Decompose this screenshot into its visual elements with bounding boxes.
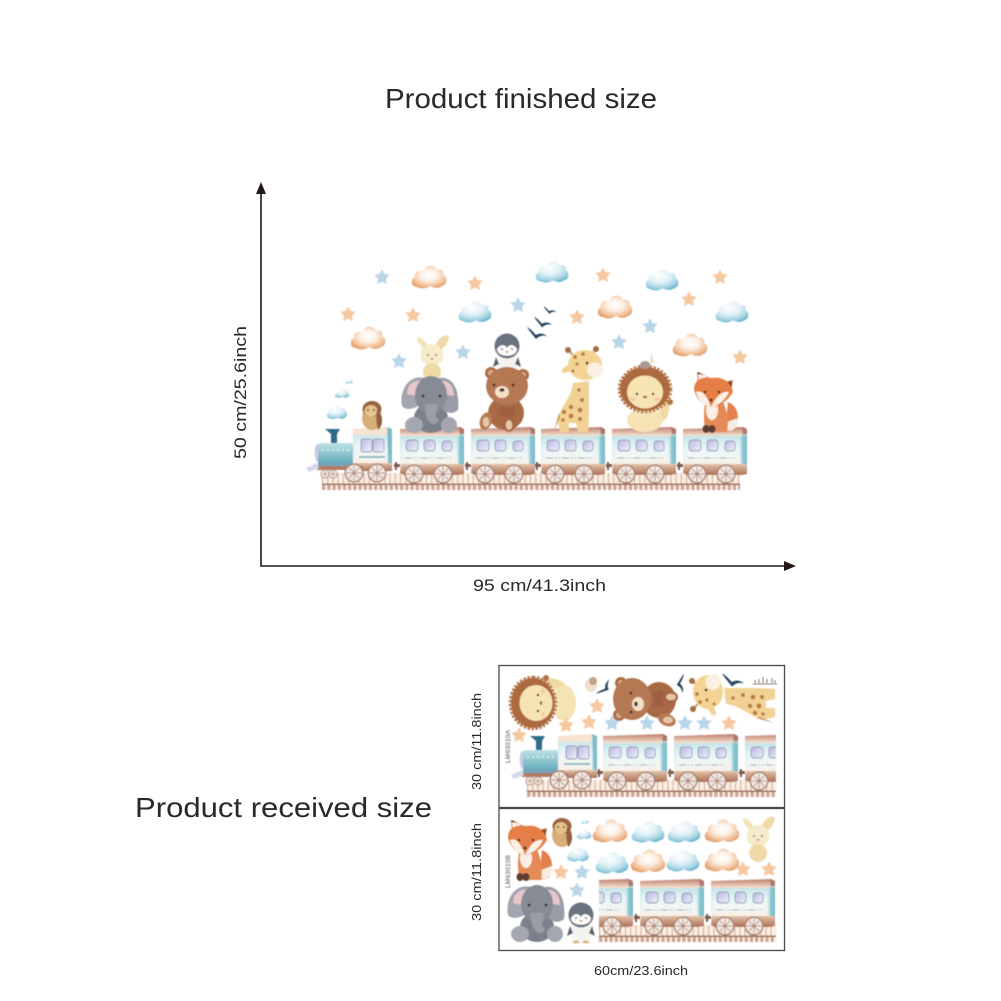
elephant (507, 885, 564, 942)
owl (362, 401, 382, 430)
title: product received size: Product received size (135, 792, 432, 823)
finished wall decal artwork (306, 261, 748, 490)
train and track clipped to the sheet (511, 733, 777, 798)
orange stars (512, 699, 736, 741)
train car 2 (465, 427, 535, 483)
owl (552, 818, 572, 847)
birds (596, 673, 744, 697)
code LM63010A: LM63010A (505, 729, 512, 763)
fox (508, 820, 552, 881)
label: sheet B height: 30 cm/11.8inch (469, 823, 484, 921)
blue stars (570, 865, 589, 896)
train car 4 (606, 427, 676, 483)
rabbit (743, 816, 775, 862)
birds (527, 306, 556, 339)
giraffe (554, 346, 603, 432)
lion (619, 366, 673, 432)
elephant (401, 376, 458, 433)
width label: 95 cm/41.3inch (473, 577, 606, 595)
label: sheet width: 60cm/23.6inch (594, 963, 688, 978)
giraffe rotated (689, 674, 775, 723)
blue stars (375, 270, 657, 367)
code LM63010B: LM63010B (505, 855, 512, 888)
train car 3 (535, 427, 605, 483)
tiny owl sticker (585, 677, 597, 692)
bear (477, 367, 529, 432)
train cars and track clipped to the sheet (598, 878, 777, 943)
sheet A frame (499, 666, 784, 808)
train car 5 (677, 427, 747, 483)
tiny bird fragment (753, 677, 777, 684)
penguin (493, 334, 521, 374)
orange stars (554, 862, 776, 878)
smoke puffs (567, 819, 591, 862)
blue clouds (459, 261, 748, 322)
blue stars (605, 716, 711, 729)
sheet A artwork (504, 673, 778, 798)
penguin (567, 902, 595, 943)
lion rotated (510, 675, 576, 729)
orange clouds (593, 820, 739, 872)
bear rotated (613, 677, 678, 729)
axes arrows: height and width (256, 182, 796, 571)
height label: 50 cm/25.6inch (232, 326, 250, 459)
sheet B artwork (504, 816, 777, 944)
little bird on lion (640, 352, 654, 369)
track (322, 473, 740, 490)
orange clouds (351, 266, 707, 356)
fox (694, 372, 738, 433)
title: product finished size: Product finished size (385, 83, 657, 114)
train car 1 (394, 427, 464, 483)
sheet B frame (499, 808, 784, 950)
rabbit (417, 335, 449, 381)
blue clouds (596, 821, 700, 873)
label: sheet A height: 30 cm/11.8inch (469, 693, 484, 790)
locomotive (306, 427, 392, 482)
smoke puffs (327, 379, 353, 419)
orange stars (341, 268, 747, 363)
